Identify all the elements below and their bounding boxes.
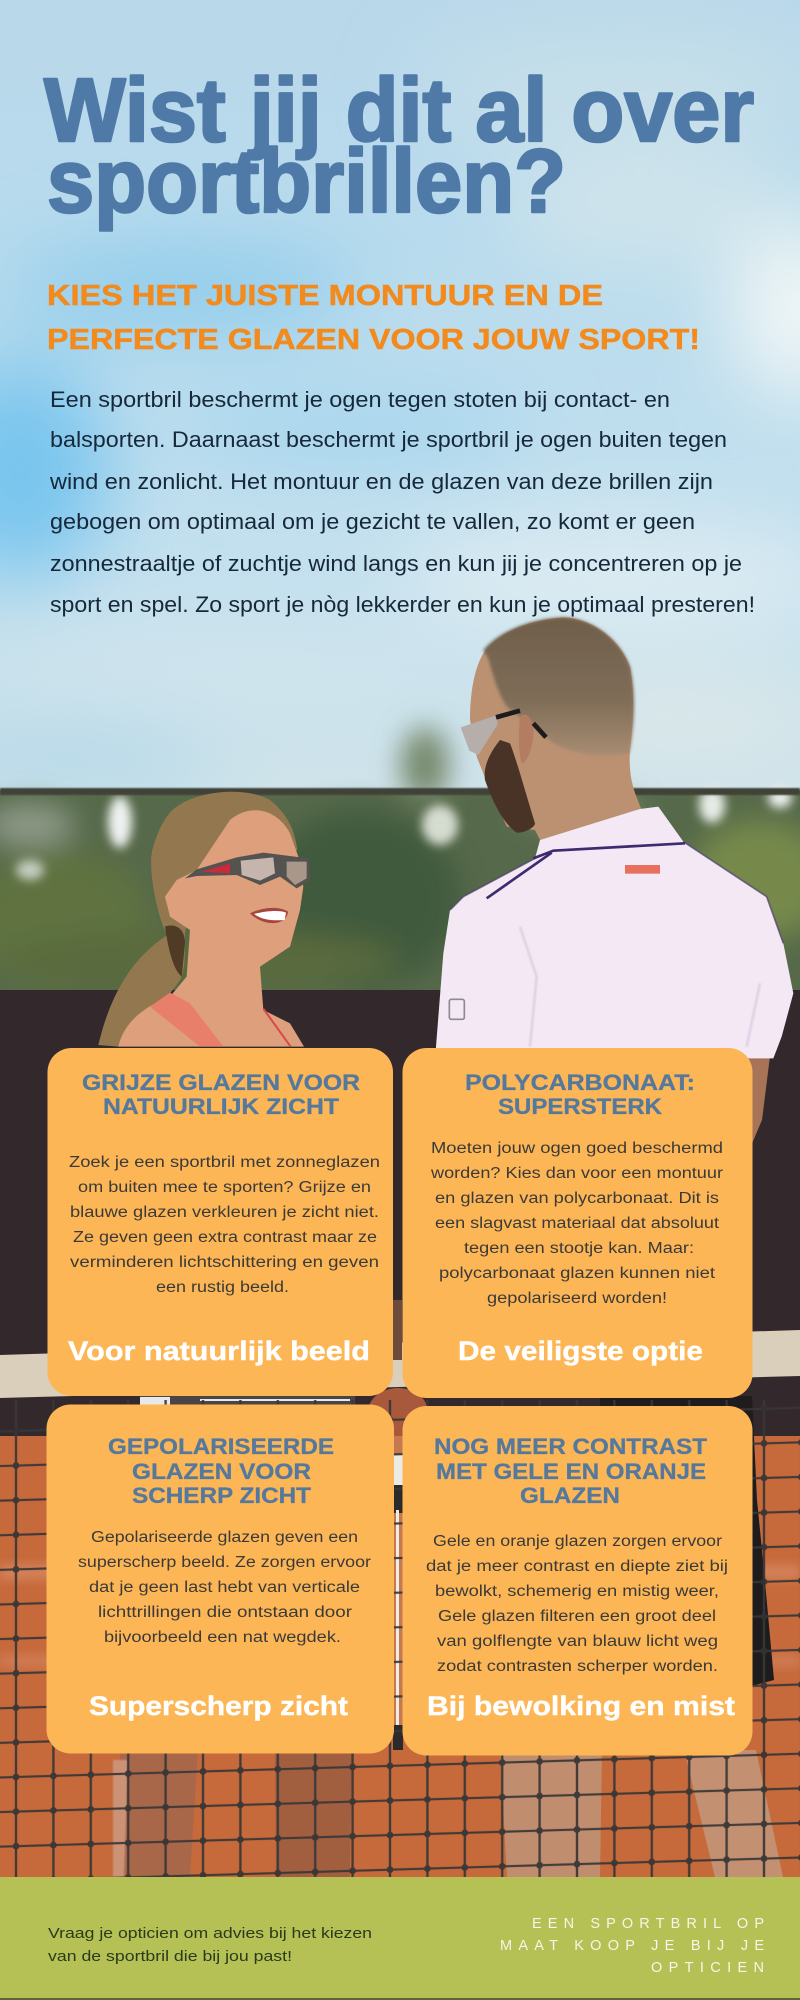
heading: polycarbonaat [465,1070,695,1119]
subtitle [47,280,700,356]
intro text: Een sportbril beschermt je ogen tegen stoten bij contact- en [50,387,670,412]
smile [250,908,288,923]
text: gepolariseerde glazen: Gepolariseerde glazen geven een [91,1529,358,1546]
text: grijze glazen: verminderen lichtschittering en geven [70,1254,379,1271]
heading: gele en oranje glazen: GLAZEN [520,1483,620,1508]
heading: gepolariseerde glazen: SCHERP ZICHT [132,1483,312,1508]
shorts and arm on the right [600,1056,774,1686]
legs [113,1750,783,1877]
footer call to action: EEN SPORTBRIL OP [532,1916,764,1932]
text: gepolariseerde glazen [78,1529,371,1646]
text: gele en oranje glazen: Gele glazen filteren een groot deel [438,1608,716,1625]
tagline: superscherp zicht: Superscherp zicht [89,1691,348,1721]
woman with sports glasses [98,792,311,1047]
text: gepolariseerde glazen: lichttrillingen die ontstaan door [98,1604,352,1621]
heading: grijze glazen [82,1070,360,1119]
footer call to action: OPTICIEN [651,1960,764,1976]
footer call to action [500,1916,764,1976]
net top band [0,1330,800,1398]
heading: gepolariseerde glazen [108,1434,334,1508]
title: sportbrillen? [47,132,566,232]
collar piping [487,843,685,898]
subtitle: PERFECTE GLAZEN VOOR JOUW SPORT! [47,324,700,356]
intro text: gebogen om optimaal om je gezicht te vallen, zo komt er geen [50,509,695,534]
text: gele en oranje glazen: zodat contrasten scherper worden. [437,1658,718,1675]
footer band [0,1877,800,2000]
footer advice text: van de sportbril die bij jou past! [48,1948,292,1965]
tagline: bij bewolking en mist: Bij bewolking en mist [427,1691,735,1721]
panel: gele en oranje glazen [402,1406,752,1756]
pink sports top [150,993,223,1047]
heading: gepolariseerde glazen: GEPOLARISEERDE [108,1434,334,1459]
heading: gepolariseerde glazen: GLAZEN VOOR [132,1459,311,1484]
heading: gele en oranje glazen: MET GELE EN ORANJE [436,1459,706,1484]
sky [0,0,800,800]
face, neck and shoulders [118,810,304,1047]
glasses [461,711,546,755]
intro text: wind en zonlicht. Het montuur en de glazen van deze brillen zijn [49,469,713,494]
dark fence wall and lower court shade [0,990,800,1440]
text: polycarbonaat: worden? Kies dan voor een montuur [430,1165,723,1182]
footer advice text [48,1925,372,1965]
title: Wist jij dit al over [44,61,754,161]
man seen from behind [436,617,793,1070]
panel: grijze glazen [48,1048,393,1396]
footer call to action: MAAT KOOP JE BIJ JE [500,1938,764,1954]
shirt label [625,865,660,874]
intro text: balsporten. Daarnaast beschermt je sportbril je ogen buiten tegen [50,427,727,452]
glasses [185,853,311,888]
text: gele en oranje glazen [426,1533,728,1675]
hair and ponytail [98,792,297,1047]
text: gele en oranje glazen: van golflengte van blauw licht weg [437,1633,718,1650]
white polo shirt [436,807,793,1070]
panel: gepolariseerde glazen [46,1404,394,1754]
net mesh [0,1400,800,1877]
footer advice text: Vraag je opticien om advies bij het kiezen [48,1925,372,1942]
text: gepolariseerde glazen: bijvoorbeeld een nat wegdek. [104,1629,341,1646]
text: polycarbonaat [430,1140,723,1307]
ear [519,715,534,763]
text: grijze glazen: Zoek je een sportbril met zonneglazen [69,1154,380,1171]
text: polycarbonaat: Moeten jouw ogen goed beschermd [431,1140,723,1157]
text: gepolariseerde glazen: dat je geen last hebt van verticale [89,1579,360,1596]
hair shadow [165,926,185,977]
racket and hand between the cards [140,1300,428,1750]
text: gepolariseerde glazen: superscherp beeld. Ze zorgen ervoor [78,1554,371,1571]
heading: grijze glazen: NATUURLIJK ZICHT [103,1094,340,1119]
heading: polycarbonaat: SUPERSTERK [498,1094,662,1119]
text: polycarbonaat: polycarbonaat glazen kunnen niet [439,1265,716,1282]
text: polycarbonaat: gepolariseerd worden! [487,1290,667,1307]
text: polycarbonaat: en glazen van polycarbonaat. Dit is [435,1190,719,1207]
text: gele en oranje glazen: Gele en oranje glazen zorgen ervoor [433,1533,722,1550]
tagline: voor natuurlijk beeld: Voor natuurlijk beeld [68,1336,370,1366]
text: grijze glazen: om buiten mee te sporten? Grijze en [78,1179,371,1196]
text: polycarbonaat: een slagvast materiaal dat absoluut [435,1215,720,1232]
text: polycarbonaat: tegen een stootje kan. Maar: [464,1240,694,1257]
text: grijze glazen [69,1154,380,1296]
panel: polycarbonaat [402,1048,752,1398]
text: gele en oranje glazen: dat je meer contrast en diepte ziet bij [426,1558,728,1575]
sleeve logo [449,999,464,1019]
text: grijze glazen: een rustig beeld. [156,1279,289,1296]
shirt shading [520,927,537,1047]
subtitle: KIES HET JUISTE MONTUUR EN DE [47,280,603,312]
beard [485,740,535,833]
title [44,61,754,232]
intro text: zonnestraaltje of zuchtje wind langs en kun jij je concentreren op je [50,551,742,576]
intro text [49,387,755,617]
short hair [483,617,634,755]
tagline: de veiligste optie: De veiligste optie [458,1336,703,1366]
head and neck [470,617,642,840]
text: gele en oranje glazen: bewolkt, schemerig en mistig weer, [435,1583,719,1600]
trees and fence [0,727,800,995]
intro text: sport en spel. Zo sport je nòg lekkerder en kun je optimaal presteren! [50,592,755,617]
heading: gele en oranje glazen [434,1434,708,1508]
heading: gele en oranje glazen: NOG MEER CONTRAST [434,1434,708,1459]
text: grijze glazen: blauwe glazen verkleuren je zicht niet. [70,1204,379,1221]
heading: polycarbonaat: POLYCARBONAAT: [465,1070,695,1095]
heading: grijze glazen: GRIJZE GLAZEN VOOR [82,1070,360,1095]
clay court [0,1436,800,1877]
text: grijze glazen: Ze geven geen extra contrast maar ze [73,1229,377,1246]
